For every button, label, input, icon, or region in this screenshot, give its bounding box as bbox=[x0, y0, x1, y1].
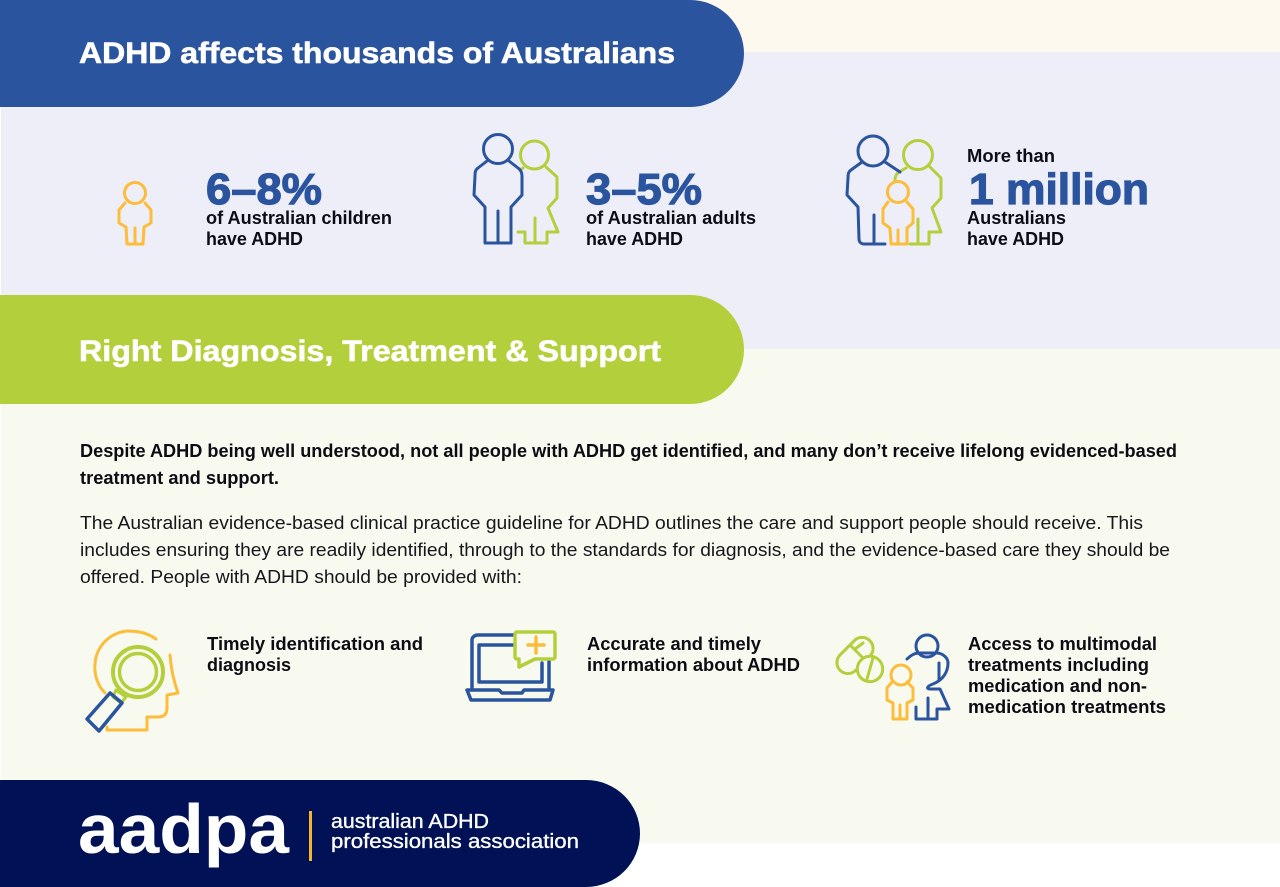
caption: children: of Australian children bbox=[206, 207, 392, 228]
heading: ADHD affects thousands of Australians bbox=[0, 0, 744, 107]
statistic: children: have ADHD bbox=[206, 228, 303, 249]
item: accurate information bbox=[467, 632, 800, 700]
icon: family bbox=[847, 136, 941, 244]
text block: bold intro: treatment and support. bbox=[80, 467, 279, 488]
figure: 6–8%: 6–8% bbox=[206, 165, 322, 214]
statistic: children bbox=[119, 165, 392, 249]
item: multimodal treatments: medication treatments bbox=[968, 696, 1166, 717]
heading: ADHD affects thousands of Australians: ADHD affects thousands of Australians bbox=[79, 37, 675, 70]
statistic: 1 million Australians bbox=[847, 136, 1149, 249]
statistic: adults bbox=[474, 134, 756, 249]
text block: guideline paragraph bbox=[80, 512, 1170, 587]
footer: AADPA logo bar: professionals association bbox=[331, 831, 579, 853]
background band: cream bbox=[0, 0, 1280, 52]
association name: australian ADHD bbox=[331, 811, 489, 833]
text block: guideline paragraph: offered. People with ADHD should be provided with: bbox=[80, 566, 522, 587]
figure: 3–5%: 3–5% bbox=[586, 165, 702, 214]
icon: head with magnifying glass bbox=[87, 631, 178, 731]
icon: two adults bbox=[474, 134, 558, 243]
text: multimodal treatments: Access to multimodal bbox=[968, 633, 1157, 654]
heading: Right Diagnosis, Treatment & Support bbox=[0, 295, 744, 404]
caption: Australians: Australians bbox=[967, 207, 1066, 228]
logo wordmark: aadpa bbox=[78, 790, 290, 868]
statistic: adults: have ADHD bbox=[586, 228, 683, 249]
text block: bold intro bbox=[80, 440, 1177, 488]
icon: child bbox=[119, 182, 151, 244]
item: multimodal treatments: treatments including bbox=[968, 654, 1149, 675]
item: multimodal treatments bbox=[832, 633, 1166, 719]
heading: Right Diagnosis, Treatment & Support: Right Diagnosis, Treatment & Support bbox=[79, 335, 661, 368]
item: timely identification bbox=[87, 631, 423, 731]
text: More than: More than bbox=[967, 145, 1055, 166]
figure: 1 million: 1 million bbox=[969, 165, 1149, 214]
panel: diagnosis background bbox=[1, 349, 1280, 843]
caption: adults: of Australian adults bbox=[586, 207, 756, 228]
text block: bold intro: Despite ADHD being well understood, not all people with ADHD get identified, and many don’t receive lifelong evidenced-based bbox=[80, 440, 1177, 461]
icon: laptop with speech bubble bbox=[467, 632, 555, 700]
text block: guideline paragraph: The Australian evidence-based clinical practice guideline for ADHD outlines the care and support people should receive. This bbox=[80, 512, 1143, 533]
panel: statistics background bbox=[1, 52, 1280, 349]
text: accurate information: Accurate and timely bbox=[587, 633, 762, 654]
text: timely identification: Timely identification and bbox=[207, 633, 423, 654]
item: multimodal treatments: medication and non- bbox=[968, 675, 1147, 696]
item: timely identification: diagnosis bbox=[207, 654, 291, 675]
item: accurate information: information about ADHD bbox=[587, 654, 800, 675]
footer: AADPA logo bar bbox=[0, 780, 640, 887]
statistic: 1 million Australians: have ADHD bbox=[967, 228, 1064, 249]
icon: pills, adult and child bbox=[832, 633, 949, 719]
logo divider bbox=[309, 811, 312, 861]
text block: guideline paragraph: includes ensuring they are readily identified, through to the standards for diagnosis, and the evidence-based care they should be bbox=[80, 539, 1170, 560]
